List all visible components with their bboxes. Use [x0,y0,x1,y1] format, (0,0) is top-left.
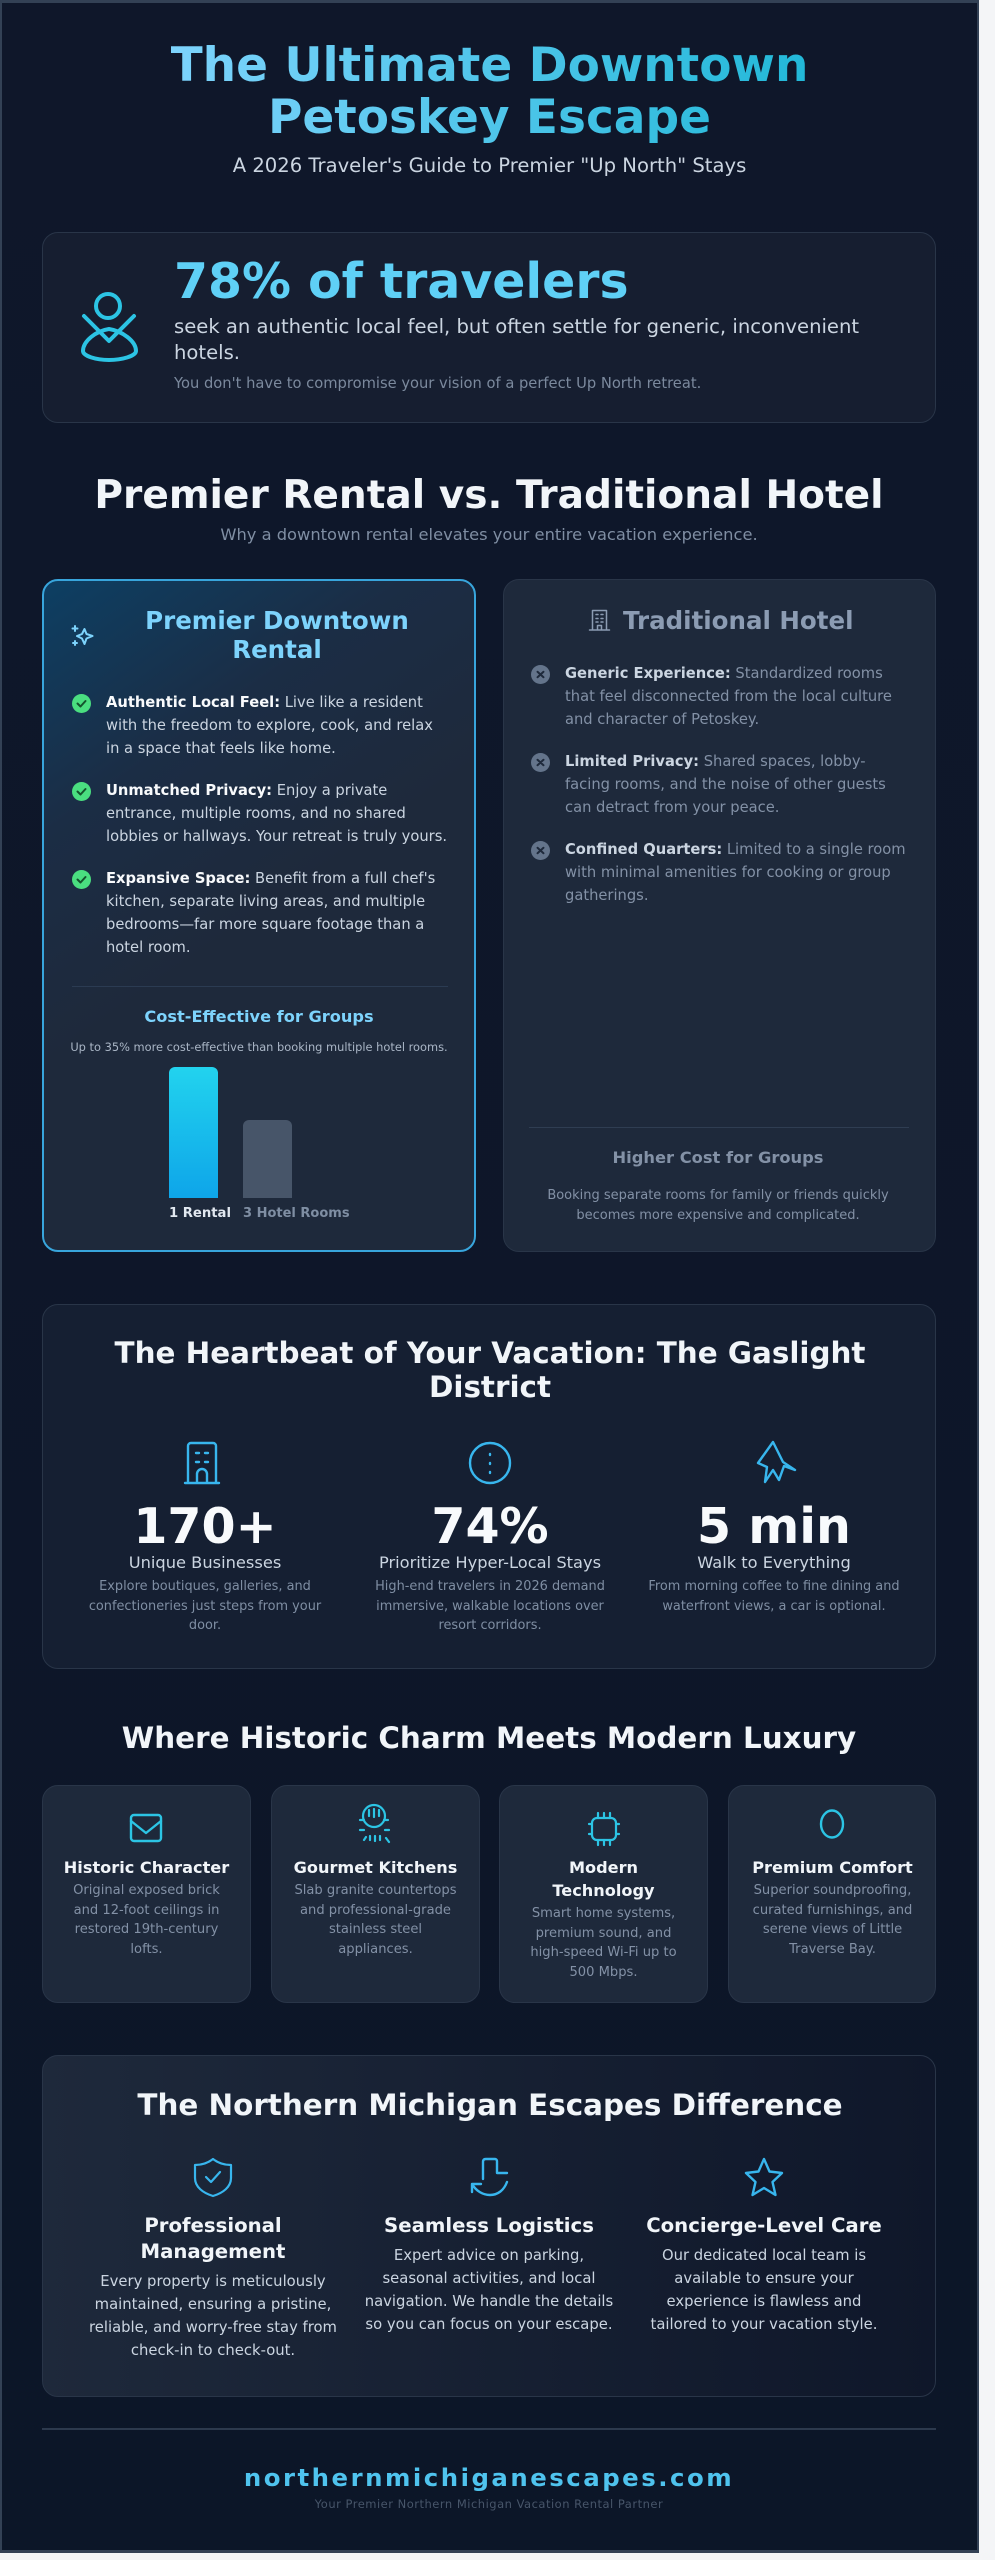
difference: professional management [89,2158,337,2359]
icon: cross [531,665,550,684]
bar label: 1 rental: 1 Rental [169,1206,231,1221]
panel: 78% statistic [42,232,936,423]
feature card: premium comfort [728,1785,936,2003]
bar chart [169,1067,350,1221]
card title: Traditional Hotel [623,606,853,635]
drawback text: Confined Quarters: Limited to a single room with minimal amenities for cooking or group gatherings. [565,841,906,904]
big number: 74% [431,1498,549,1555]
cost callout [70,1007,448,1054]
drawback: confined quarters [531,841,906,904]
big number: 5 min [697,1498,851,1555]
feature text: Original exposed brick and 12-foot ceilings in restored 19th-century lofts. [73,1883,220,1957]
icon: envelope [130,1814,162,1842]
benefit: expansive space [72,870,435,956]
bar: 1 rental [169,1067,218,1198]
icon: traveler [81,292,138,362]
icon: oval [820,1809,844,1839]
stat label: Prioritize Hyper-Local Stays [379,1553,601,1572]
card title: Premier Downtown Rental [145,606,409,664]
icon: compass dial [468,1442,512,1484]
stat note: You don't have to compromise your vision of a perfect Up North retreat. [174,375,701,392]
bar: 3 hotel rooms [243,1120,292,1198]
difference text: Our dedicated local team is available to ensure your experience is flawless and tailored to your vacation style. [651,2247,877,2333]
drawback text: Limited Privacy: Shared spaces, lobby-facing rooms, and the noise of other guests can detract from your peace. [565,753,886,816]
callout title: Higher Cost for Groups [613,1148,823,1167]
panel: northern michigan escapes difference [42,2055,936,2397]
cost callout [547,1148,889,1223]
feature card: modern technology [499,1785,708,2003]
icon: navigation arrow [756,1440,796,1484]
stat label: Unique Businesses [129,1553,281,1572]
icon: cross [531,841,550,860]
panel: premier downtown rental [42,579,476,1252]
stat description: From morning coffee to fine dining and waterfront views, a car is optional. [648,1579,900,1614]
difference: concierge-level care [617,2156,911,2376]
heading: charm meets luxury: Where Historic Charm Meets Modern Luxury [122,1721,856,1755]
benefit text: Unmatched Privacy: Enjoy a private entrance, multiple rooms, and no shared lobbies or hallways. Your retreat is truly yours. [106,782,447,845]
icon: check [72,870,91,889]
subtitle: A 2026 Traveler's Guide to Premier "Up North" Stays [233,154,746,177]
benefit text: Expansive Space: Benefit from a full chef's kitchen, separate living areas, and multiple bedrooms—far more square footage than a hotel room. [106,870,435,956]
stat description: Explore boutiques, galleries, and confectioneries just steps from your door. [89,1579,321,1633]
callout text: Up to 35% more cost-effective than booking multiple hotel rooms. [70,1040,448,1054]
feature text: Superior soundproofing, curated furnishings, and serene views of Little Traverse Bay. [753,1883,912,1957]
drawbacks list [531,665,906,904]
icon: check [72,782,91,801]
benefit text: Authentic Local Feel: Live like a resident with the freedom to explore, cook, and relax in a space that feels like home. [106,694,433,757]
stat: walk [648,1440,900,1614]
icon: hotel building [588,610,610,631]
icon: cross [531,753,550,772]
benefits list [72,694,447,956]
benefit: authentic local feel [72,694,433,757]
stat description: seek an authentic local feel, but often settle for generic, inconvenient hotels. [174,315,859,364]
feature text: Slab granite countertops and professional-grade stainless steel appliances. [294,1883,457,1957]
stat: hyper-local [375,1442,605,1633]
stat description: High-end travelers in 2026 demand immersive, walkable locations over resort corridors. [375,1579,605,1633]
difference title: Concierge-Level Care [646,2214,882,2237]
drawback: limited privacy [531,753,886,816]
difference text: Expert advice on parking, seasonal activities, and local navigation. We handle the details so you can focus on your escape. [365,2247,613,2333]
callout text: Booking separate rooms for family or friends quickly becomes more expensive and complicated. [547,1188,889,1223]
feature card: historic character [42,1785,251,2003]
drawback: generic experience [531,665,892,728]
stat label: Walk to Everything [697,1553,851,1572]
subheading: Why a downtown rental elevates your entire vacation experience. [220,525,758,544]
icon: check [72,694,91,713]
difference title: Seamless Logistics [384,2214,594,2237]
bar label: 3 hotel rooms: 3 Hotel Rooms [243,1206,350,1221]
drawback text: Generic Experience: Standardized rooms that feel disconnected from the local culture and character of Petoskey. [565,665,892,728]
panel: traditional hotel [503,579,936,1252]
section heading: comparison [94,473,884,544]
icon: cooktop [358,1804,390,1844]
stat: businesses [89,1442,322,1633]
feature card: gourmet kitchens [271,1785,480,2003]
title: The Ultimate Downtown [171,38,808,93]
icon: sparkles [72,625,94,646]
feature title: Premium Comfort [752,1858,913,1877]
tagline: Your Premier Northern Michigan Vacation Rental Partner [315,2497,663,2511]
difference text: Every property is meticulously maintained, ensuring a pristine, reliable, and worry-free stay from check-in to check-out. [89,2273,337,2359]
heading: The Northern Michigan Escapes Difference [137,2088,843,2122]
feature title: Historic Character [64,1858,229,1877]
title: Petoskey Escape [268,90,711,145]
footer [42,2461,936,2517]
feature title: Gourmet Kitchens [294,1858,457,1877]
icon: logistics loop [470,2158,508,2196]
heading: Premier Rental vs. Traditional Hotel [94,473,884,518]
big number: 170+ [133,1498,277,1555]
icon: star [745,2158,783,2196]
heading: The Heartbeat of Your Vacation: The Gaslight District [115,1336,865,1404]
callout title: Cost-Effective for Groups [144,1007,374,1026]
benefit: unmatched privacy [72,782,447,845]
feature text: Smart home systems, premium sound, and high-speed Wi-Fi up to 500 Mbps. [530,1906,677,1980]
difference title: Professional Management [141,2214,285,2263]
website: northernmichiganescapes.com [244,2463,734,2492]
difference: seamless logistics [342,2156,636,2376]
title [171,38,808,145]
icon: chip [588,1812,620,1846]
feature title: Modern Technology [552,1858,655,1900]
icon: shield check [194,2158,232,2196]
stat headline: 78% of travelers [174,253,629,310]
header [171,38,808,177]
panel: gaslight district [42,1304,936,1669]
icon: building [184,1442,220,1484]
